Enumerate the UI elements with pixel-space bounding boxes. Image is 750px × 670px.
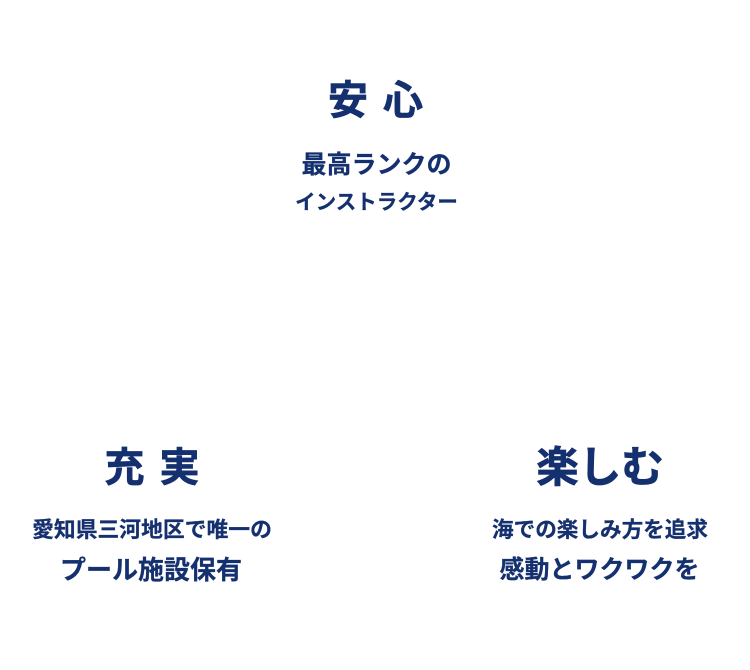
heading: 安心: 安心 — [328, 79, 438, 123]
text: プール施設保有: プール施設保有 — [60, 555, 242, 585]
panel: 充実 — [32, 446, 272, 585]
text: 最高ランクの: 最高ランクの — [301, 151, 452, 179]
heading: 充実: 充実 — [104, 446, 214, 490]
text: 海での楽しみ方を追求: 海での楽しみ方を追求 — [492, 517, 708, 542]
text: 感動とワクワクを: 感動とワクワクを — [499, 556, 700, 584]
text: 愛知県三河地区で唯一の: 愛知県三河地区で唯一の — [32, 517, 272, 542]
panel: 安心 — [295, 79, 458, 214]
heading: 楽しむ: 楽しむ — [536, 445, 664, 492]
panel: 楽しむ — [492, 445, 708, 584]
text: インストラクター: インストラクター — [295, 191, 458, 214]
